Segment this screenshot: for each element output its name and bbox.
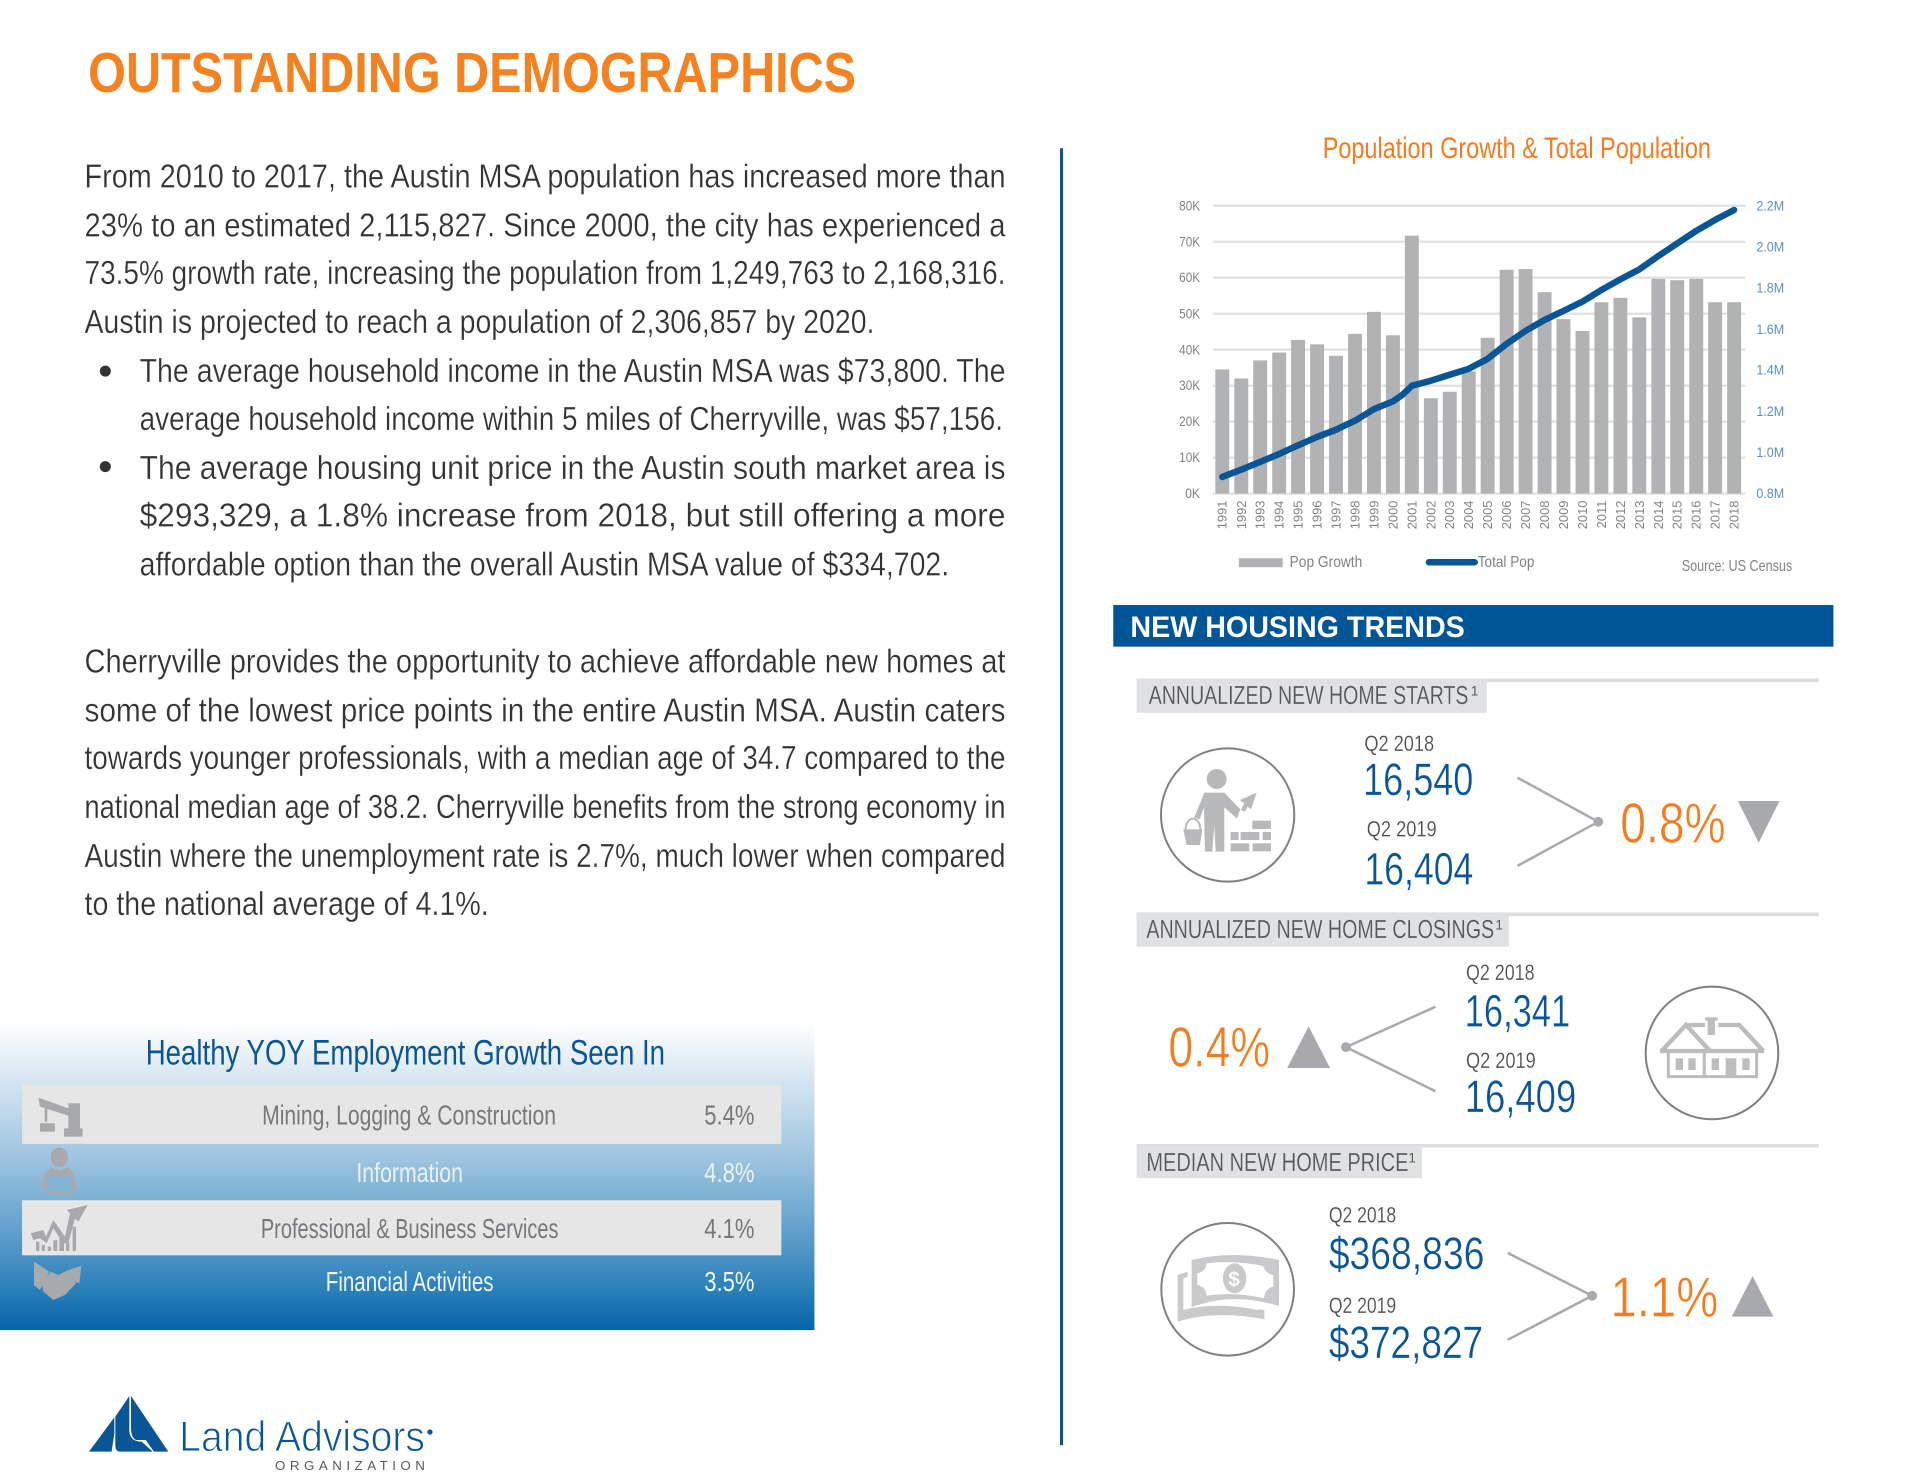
chart: population growth and total population [1179,197,1792,575]
year labels: 1999 [1366,501,1381,529]
year labels: 1997 [1328,501,1343,529]
text block: Cherryville paragraph: to the national average of 4.1%. [85,886,489,923]
change percentage: 0.4% [1168,1016,1270,1079]
year labels: 1991 [1215,501,1230,529]
values: Q2 2018 [1329,1202,1396,1227]
row: information: 4.8% [704,1157,754,1188]
year labels: 2005 [1480,501,1495,529]
bullet list: income and housing price: average household income within 5 miles of Cherryville, was $57,156. [140,401,1003,438]
right axis labels: 0.8M [1756,485,1784,501]
panel: employment growth [0,1023,814,1330]
text block: Cherryville paragraph: national median age of 38.2. Cherryville benefits from the strong economy in [85,789,1005,826]
values: 16,404 [1364,843,1473,894]
legend: Pop Growth [1290,554,1362,571]
values: Q2 2019 [1466,1048,1536,1073]
values [1329,1202,1484,1368]
icon: down triangle [1738,801,1780,843]
left axis labels [1179,197,1201,501]
right axis labels: 2.0M [1756,238,1784,254]
left axis labels: 50K [1179,305,1201,321]
year labels: 2004 [1461,501,1476,529]
year labels: 2000 [1385,501,1400,529]
text block: Cherryville paragraph [85,643,1005,923]
icon: money: $ [1228,1268,1240,1291]
left axis labels: 0K [1185,485,1201,501]
legend: Total Pop [1478,554,1535,571]
text block: population intro: Austin is projected to reach a population of 2,306,857 by 2020. [85,304,874,341]
year labels: 1995 [1291,501,1306,529]
section band: new housing trends: NEW HOUSING TRENDS [1130,611,1465,644]
panel heading: Healthy YOY Employment Growth Seen In [146,1032,665,1072]
right axis labels: 1.4M [1756,362,1784,378]
year labels: 2013 [1632,501,1647,529]
values: $368,836 [1329,1228,1484,1279]
section tab: 1 [1408,1150,1416,1165]
bars: pop growth [1215,236,1741,494]
values: Q2 2019 [1367,816,1437,841]
logo: Land Advisors Organization [89,1396,433,1473]
icon: worker with bricks [1161,748,1294,882]
panel: median new home price [1137,1144,1819,1368]
year labels: 1993 [1253,501,1268,529]
year labels: 2014 [1651,501,1666,529]
left axis labels: 80K [1179,197,1201,213]
text block: Cherryville paragraph: some of the lowest price points in the entire Austin MSA. Austin caters [85,692,1005,729]
section tab [1137,912,1819,947]
section tab: 1 [1495,918,1503,933]
values [1363,731,1473,894]
values: $372,827 [1329,1317,1483,1368]
year labels: 2002 [1423,501,1438,529]
bullet list: income and housing price: The average housing unit price in the Austin south market area is [140,450,1005,487]
right axis labels: 2.2M [1756,197,1784,213]
year labels [1215,501,1742,529]
logo: Land Advisors Organization: ORGANIZATION [275,1458,425,1473]
section tab [1137,678,1819,713]
year labels: 2008 [1537,501,1552,529]
icon: up triangle [1732,1276,1773,1317]
legend [1239,554,1535,571]
year labels: 2003 [1442,501,1457,529]
text block: population intro: From 2010 to 2017, the Austin MSA population has increased more than [85,158,1005,195]
icon: money [1161,1223,1294,1356]
year labels: 1996 [1310,501,1325,529]
year labels: 2017 [1708,501,1723,529]
logo: Land Advisors Organization: Land Advisors [179,1413,425,1461]
right axis labels: 1.2M [1756,403,1784,419]
year labels: 2001 [1404,501,1419,529]
text block: Cherryville paragraph: Cherryville provides the opportunity to achieve affordable new homes at [85,643,1005,680]
icon: person at laptop [42,1147,77,1194]
left axis labels: 70K [1179,233,1201,249]
year labels: 2015 [1670,501,1685,529]
year labels: 1994 [1272,501,1287,529]
bullet list: income and housing price [100,353,1005,584]
text block: Cherryville paragraph: Austin where the unemployment rate is 2.7%, much lower when compared [85,838,1005,875]
change percentage: 1.1% [1611,1266,1718,1329]
icon: rising chart [31,1205,88,1251]
text block: Cherryville paragraph: towards younger professionals, with a median age of 34.7 compared to the [85,740,1005,777]
panel: annualized new home starts [1137,678,1819,894]
year labels: 2006 [1499,501,1514,529]
panel: annualized new home closings [1137,912,1819,1122]
text block: population intro: 23% to an estimated 2,115,827. Since 2000, the city has experienced a [85,207,1006,244]
bullet list: income and housing price: $293,329, a 1.8% increase from 2018, but still offering a more [140,498,1005,535]
values: 16,409 [1465,1071,1576,1122]
arrow: comparison connector [1341,1007,1435,1091]
section tab: 1 [1471,684,1478,699]
values [1465,960,1576,1122]
row: financial: Financial Activities [326,1266,494,1297]
row: mining: Mining, Logging & Construction [262,1099,556,1130]
row: financial [326,1266,754,1297]
left axis labels: 20K [1179,413,1201,429]
year labels: 2009 [1556,501,1571,529]
values: Q2 2018 [1466,960,1535,985]
text block: population intro [85,158,1006,341]
row: financial: 3.5% [704,1266,754,1297]
row: information: Information [356,1157,463,1188]
icon: up triangle [1287,1026,1330,1068]
icon: handshake [34,1262,81,1300]
right axis labels: 1.6M [1756,321,1784,337]
bullet list: income and housing price: affordable option than the overall Austin MSA value of $334,702. [140,547,949,584]
vertical divider [1060,148,1063,1445]
year labels: 2018 [1727,501,1742,529]
year labels: 2010 [1575,501,1590,529]
bullet list: income and housing price: The average household income in the Austin MSA was $73,800. The [140,353,1005,390]
change percentage: 0.8% [1620,792,1726,855]
year labels: 2012 [1613,501,1628,529]
left axis labels: 40K [1179,341,1201,357]
section tab [1137,1144,1819,1178]
icon: house [1646,987,1778,1119]
year labels: 1992 [1234,501,1249,529]
icon: crane [38,1098,83,1137]
row: mining [22,1085,781,1144]
text block: population intro: 73.5% growth rate, increasing the population from 1,249,763 to 2,168,316. [85,255,1005,292]
values: Q2 2019 [1329,1293,1396,1318]
line: total pop [1222,210,1734,477]
section tab: MEDIAN NEW HOME PRICE [1146,1149,1408,1177]
row: professional: Professional & Business Services [261,1213,558,1244]
year labels: 2011 [1594,501,1609,528]
section tab: ANNUALIZED NEW HOME CLOSINGS [1146,916,1494,944]
arrow: comparison connector [1517,778,1603,866]
row: professional: 4.1% [704,1213,754,1244]
title: OUTSTANDING DEMOGRAPHICS [88,41,856,104]
values: Q2 2018 [1364,731,1434,756]
year labels: 1998 [1347,501,1362,529]
row: information [356,1157,754,1188]
values: 16,341 [1465,985,1570,1036]
year labels: 2016 [1689,501,1704,529]
source note: Source: US Census [1682,558,1792,575]
chart title: Population Growth & Total Population [1323,132,1711,165]
right axis labels: 1.0M [1756,444,1784,460]
section tab: ANNUALIZED NEW HOME STARTS [1149,682,1468,710]
left axis labels: 30K [1179,377,1201,393]
year labels: 2007 [1518,501,1533,529]
arrow: comparison connector [1508,1253,1597,1340]
left axis labels: 10K [1179,449,1201,465]
section band: new housing trends [1113,605,1833,647]
values: 16,540 [1363,754,1473,805]
left axis labels: 60K [1179,269,1201,285]
right axis labels [1756,197,1784,501]
row: mining: 5.4% [704,1099,754,1130]
row: professional [22,1200,781,1255]
right axis labels: 1.8M [1756,280,1784,296]
